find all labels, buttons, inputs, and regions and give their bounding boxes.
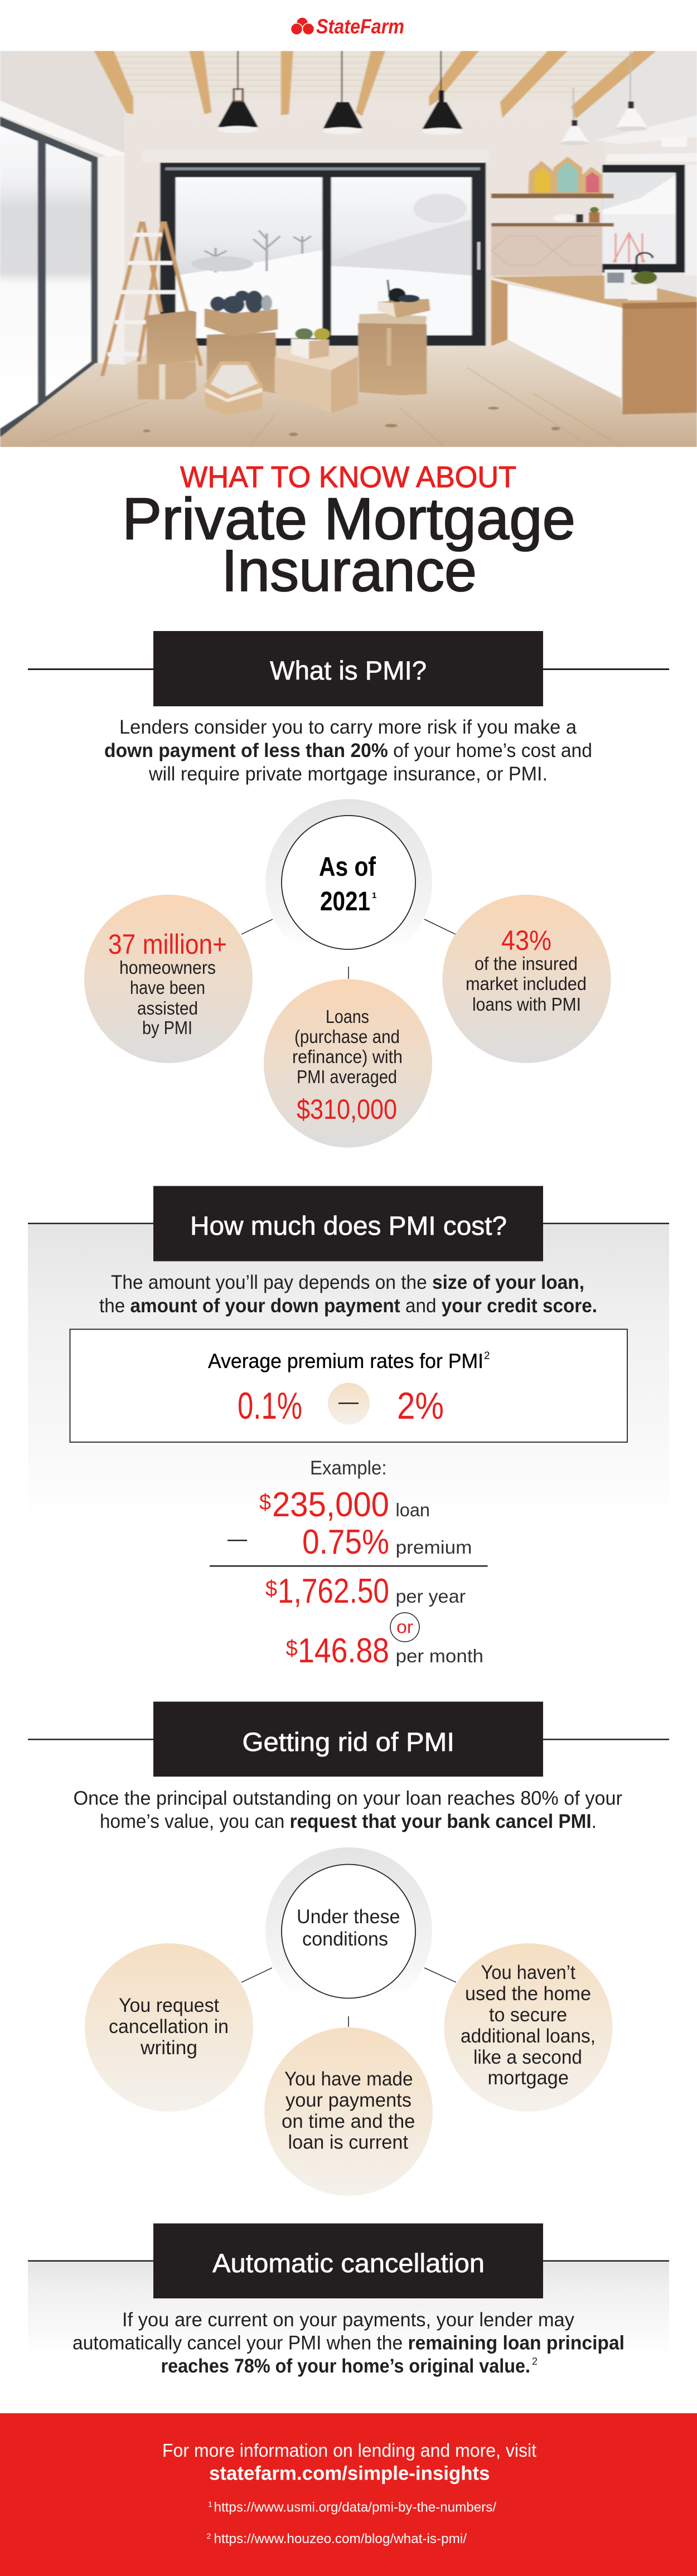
- heading: how much does PMI cost: How much does PMI cost?: [190, 1211, 507, 1240]
- center circle: as of 2021: 2021: [320, 887, 370, 916]
- section: what is PMI: [28, 631, 669, 1147]
- worked example: [210, 1457, 487, 1670]
- per month amount: per month: [396, 1646, 483, 1666]
- kicker: what to know about: WHAT TO KNOW ABOUT: [180, 460, 516, 494]
- footnotes: [206, 2500, 496, 2546]
- or badge: or: [396, 1617, 413, 1637]
- premium rates box: 2%: [397, 1385, 444, 1427]
- loan amount: 235,000: [272, 1486, 389, 1524]
- logo: State Farm: [291, 15, 404, 38]
- section: how much does PMI cost: [28, 1186, 669, 1670]
- stat circle: 43 percent: of the insured: [475, 953, 578, 974]
- condition circle: payments on time: [264, 2027, 433, 2196]
- condition circle: request in writing: [85, 1943, 253, 2112]
- loan amount: $: [259, 1490, 271, 1515]
- stat circle: 43 percent: loans with PMI: [472, 994, 581, 1015]
- automatic cancellation text: reaches 78% of your home’s original value.: [161, 2355, 530, 2377]
- gradient panel: [28, 2261, 669, 2355]
- per month amount: 146.88: [298, 1632, 389, 1670]
- title line: insurance: Insurance: [221, 538, 477, 604]
- center circle: under these conditions: [265, 1847, 432, 2014]
- footnotes: https://www.houzeo.com/blog/what-is-pmi/: [214, 2531, 467, 2546]
- per year amount: [265, 1572, 466, 1610]
- condition circle: request in writing: You request: [119, 1995, 219, 2016]
- automatic cancellation text: [72, 2309, 625, 2377]
- automatic cancellation text: automatically cancel your PMI when the remaining loan principal: [72, 2332, 625, 2354]
- footnotes: https://www.usmi.org/data/pmi-by-the-numbers/: [214, 2500, 496, 2515]
- heading: automatic cancellation: [153, 2223, 543, 2298]
- intro text: Lenders consider you to carry more risk if you make a: [119, 716, 577, 738]
- gradient panel: [28, 1224, 669, 1525]
- per year amount: 1,762.50: [278, 1572, 389, 1610]
- heading: what is PMI: What is PMI?: [270, 656, 427, 685]
- stat circle: loans averaged $310,000: Loans: [326, 1006, 369, 1027]
- call to action: statefarm.com/simple-insights: [209, 2463, 490, 2484]
- premium rates box: Average premium rates for PMI: [208, 1350, 483, 1372]
- condition circle: payments on time: You have made: [284, 2068, 413, 2090]
- heading: how much does PMI cost: [153, 1186, 543, 1261]
- connector lines: [241, 1968, 456, 2027]
- stat circle: 37 million homeowners: have been: [130, 977, 205, 998]
- condition circle: no additional loans: additional loans,: [461, 2025, 596, 2047]
- condition circle: request in writing: cancellation in: [109, 2016, 229, 2037]
- heading: automatic cancellation: Automatic cancellation: [212, 2248, 485, 2278]
- stat circle: 37 million homeowners: [84, 895, 253, 1063]
- condition circle: payments on time: loan is current: [288, 2132, 408, 2153]
- condition circle: no additional loans: [444, 1943, 612, 2112]
- premium percent: [228, 1523, 472, 1561]
- intro text: will require private mortgage insurance, or PMI.: [148, 763, 548, 785]
- section rule: [28, 1223, 669, 1224]
- center circle: as of 2021: [265, 799, 432, 966]
- or badge: [390, 1613, 419, 1642]
- condition circle: no additional loans: used the home: [465, 1983, 591, 2005]
- center circle: under these conditions: conditions: [302, 1928, 388, 1950]
- call to action: [162, 2440, 536, 2484]
- stat circle: 37 million homeowners: homeowners: [119, 957, 216, 978]
- title line: private mortgage: Private Mortgage: [122, 486, 575, 552]
- premium rates box: 0.1%: [238, 1385, 302, 1427]
- stat circle: 37 million homeowners: 37 million+: [108, 929, 227, 960]
- center circle: as of 2021: As of: [319, 852, 376, 882]
- center circle: under these conditions: Under these: [297, 1906, 400, 1928]
- example label: Example:: [310, 1457, 387, 1479]
- stat circle: loans averaged $310,000: refinance) with: [292, 1046, 403, 1067]
- logo wordmark: StateFarm: [316, 15, 404, 38]
- premium rates box: [70, 1329, 627, 1442]
- premium percent: 0.75%: [302, 1523, 389, 1561]
- cost description text: [99, 1272, 597, 1317]
- stat circle: loans averaged $310,000: PMI averaged: [297, 1066, 397, 1087]
- condition circle: request in writing: writing: [140, 2037, 197, 2059]
- footer band: [0, 2413, 697, 2576]
- intro text: down payment of less than 20% of your home’s cost and: [104, 740, 592, 761]
- stat circle: 37 million homeowners: assisted: [137, 998, 198, 1018]
- heading: getting rid of PMI: [153, 1701, 543, 1777]
- stat circle: loans averaged $310,000: $310,000: [297, 1094, 397, 1125]
- section rule: [28, 1739, 669, 1740]
- getting rid description text: home’s value, you can request that your bank cancel PMI.: [100, 1811, 597, 1832]
- connector lines: [241, 919, 456, 979]
- getting rid description text: Once the principal outstanding on your loan reaches 80% of your: [74, 1787, 622, 1809]
- per year amount: $: [265, 1576, 277, 1601]
- per year amount: per year: [396, 1586, 466, 1607]
- stat circle: 37 million homeowners: by PMI: [142, 1017, 192, 1038]
- condition circle: no additional loans: like a second: [473, 2046, 582, 2068]
- intro text: [104, 716, 592, 785]
- condition circle: no additional loans: You haven’t: [481, 1962, 575, 1983]
- section: getting rid of PMI: [28, 1701, 669, 2196]
- automatic cancellation text: If you are current on your payments, your lender may: [122, 2309, 574, 2331]
- stat circle: 43 percent: [443, 895, 611, 1063]
- section: automatic cancellation: [28, 2223, 669, 2377]
- getting rid description text: [74, 1787, 622, 1832]
- icon: three overlapping circles: [291, 17, 314, 35]
- condition circle: payments on time: your payments: [285, 2089, 412, 2111]
- heading: getting rid of PMI: Getting rid of PMI: [242, 1727, 454, 1757]
- condition circle: no additional loans: to secure: [489, 2004, 567, 2026]
- per month amount: [286, 1632, 483, 1670]
- condition circle: no additional loans: mortgage: [487, 2067, 569, 2089]
- stat circle: loans averaged $310,000: [264, 979, 432, 1147]
- premium rates box: 2: [484, 1350, 490, 1362]
- stat circle: loans averaged $310,000: (purchase and: [294, 1026, 400, 1047]
- stat circle: 43 percent: market included: [466, 973, 587, 994]
- loan amount: loan: [396, 1500, 430, 1520]
- heading: what is PMI: [153, 631, 543, 706]
- title: [122, 460, 575, 604]
- section rule: [28, 2260, 669, 2262]
- center circle: as of 2021: 1: [372, 891, 376, 900]
- sum rule: [210, 1565, 487, 1566]
- section rule: [28, 668, 669, 670]
- premium percent: premium: [396, 1537, 472, 1558]
- footnotes: 1: [208, 2500, 212, 2509]
- automatic cancellation text: 2: [532, 2356, 538, 2367]
- hero photo: kitchen interior with moving boxes: [0, 50, 697, 448]
- per month amount: $: [286, 1636, 298, 1661]
- condition circle: payments on time: on time and the: [282, 2111, 415, 2132]
- stat circle: 43 percent: 43%: [501, 925, 551, 956]
- cost description text: the amount of your down payment and your credit score.: [99, 1295, 597, 1317]
- cost description text: The amount you’ll pay depends on the size of your loan,: [111, 1272, 584, 1293]
- call to action: For more information on lending and more, visit: [162, 2440, 536, 2461]
- footnotes: 2: [206, 2531, 211, 2540]
